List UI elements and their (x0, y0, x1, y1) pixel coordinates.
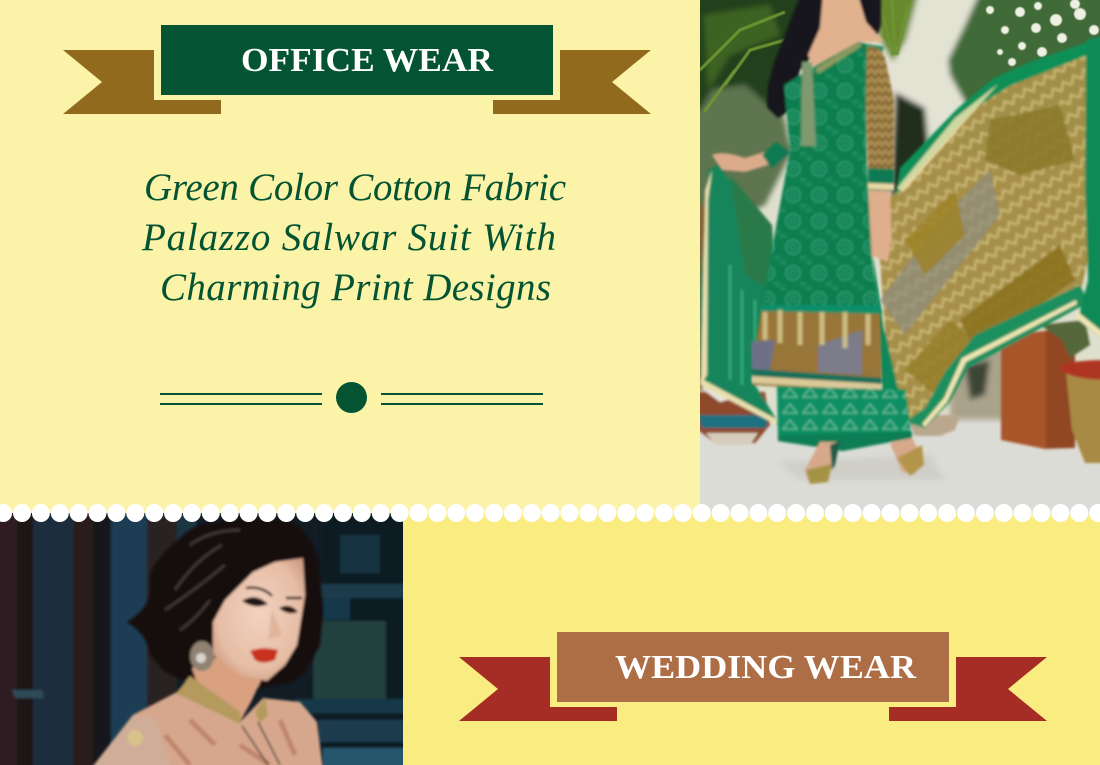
banner plate (557, 632, 949, 702)
ribbon tail: left (459, 657, 617, 721)
collar (176, 676, 240, 724)
palm fronds (700, 0, 908, 112)
ribbon tail: right (493, 50, 651, 114)
nose shadow (268, 612, 282, 640)
flowering plant (948, 0, 1100, 115)
ribbon tail: left (63, 50, 221, 114)
panel: office wear background (0, 0, 700, 514)
hair highlights (165, 530, 240, 630)
pot left (695, 392, 770, 443)
heading: office wear: OFFICE WEAR (241, 42, 493, 79)
sleeve and cuffs (866, 47, 894, 170)
ribbon banner: office wear (63, 25, 651, 114)
dupatta main body (878, 42, 1100, 426)
palazzo (777, 386, 912, 451)
lips (250, 648, 278, 662)
hair (767, 0, 881, 118)
text block: product description: Palazzo Salwar Suit With (141, 216, 556, 259)
banner plate (161, 25, 553, 95)
left foliage mass (670, 0, 805, 240)
left dupatta (700, 165, 780, 425)
floor (700, 416, 1100, 514)
heading: wedding wear: WEDDING WEAR (615, 649, 916, 686)
pot right (1066, 372, 1100, 463)
centre fern (878, 0, 920, 64)
white flowers (986, 0, 1099, 66)
earring (190, 641, 214, 671)
lower wall and wood (700, 202, 706, 392)
photo: woman in peach wedding outfit (0, 500, 420, 765)
panel: wedding wear background (0, 513, 1100, 765)
photo: woman in green palazzo salwar suit (670, 0, 1100, 530)
ornament: double lines with centre dot (160, 382, 543, 413)
neck (192, 655, 262, 722)
face (213, 558, 305, 681)
eyes (242, 597, 268, 606)
pot back (905, 415, 960, 436)
kurta side panel (872, 256, 900, 392)
feet (805, 442, 838, 480)
wood block (1001, 330, 1075, 449)
garment (132, 691, 324, 765)
kurta border panel (752, 305, 882, 392)
ribbon tail: right (889, 657, 1047, 721)
hair (127, 519, 323, 688)
text block: product description: Green Color Cotton Fabric (144, 166, 566, 209)
divider: pearl scallop row (0, 504, 1100, 522)
skin (808, 0, 884, 70)
kurta (752, 42, 884, 392)
text block: product description (141, 166, 566, 309)
text block: product description: Charming Print Designs (160, 266, 551, 309)
dupatta green edges (895, 38, 1100, 196)
ribbon banner: wedding wear (459, 632, 1047, 721)
